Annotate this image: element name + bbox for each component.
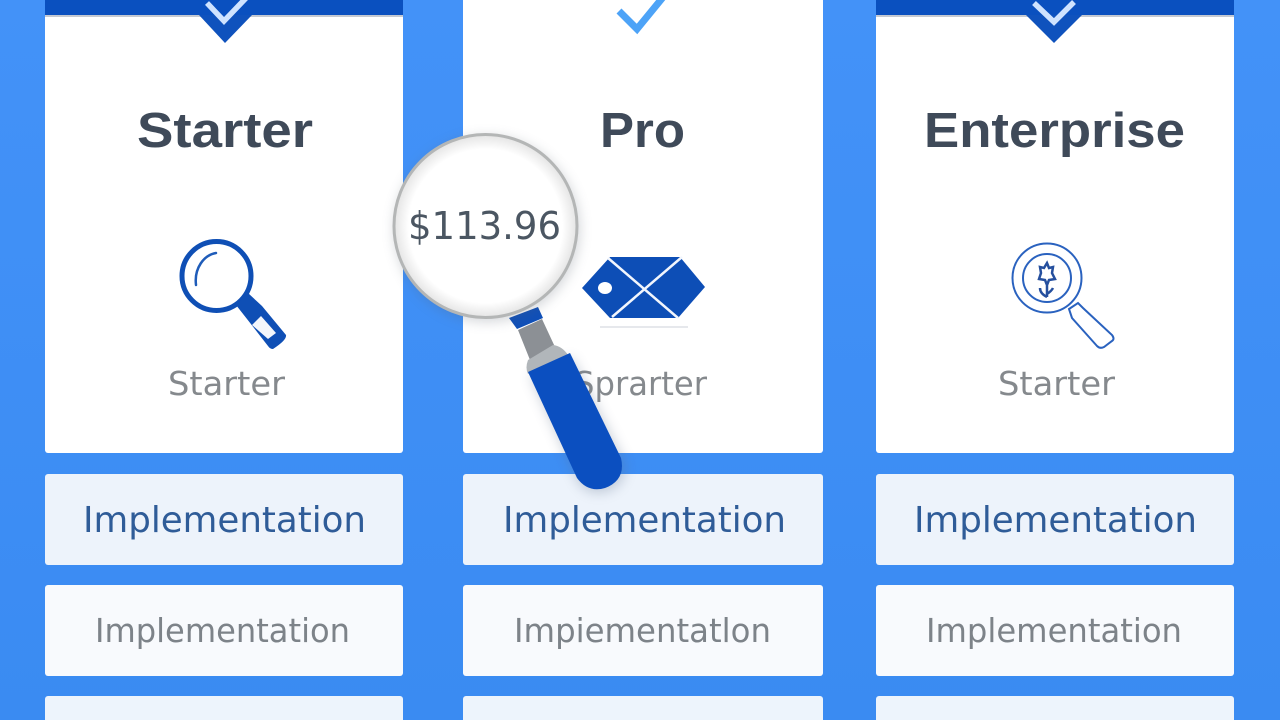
- Starter feature row 3: [45, 696, 403, 720]
- Enterprise card: [876, 0, 1234, 453]
- Starter feature row 2: [45, 585, 403, 676]
- Starter feature row 2: Implementation: [95, 611, 350, 650]
- Pro sub-label: Sprarter: [574, 364, 707, 403]
- panel: Enterprise column: [876, 0, 1234, 720]
- icon: price tag: [582, 257, 705, 328]
- Enterprise header band: [876, 0, 1234, 43]
- Enterprise feature row 2: [876, 585, 1234, 676]
- icon: magnifying glass: [182, 242, 286, 349]
- panel: Starter column: [45, 0, 403, 720]
- Pro feature row 1: [463, 474, 823, 565]
- Starter header band: [45, 0, 403, 43]
- icon: Enterprise check mark: [1034, 2, 1074, 22]
- Starter feature row 1: Implementation: [83, 500, 366, 541]
- Starter feature row 1: [45, 474, 403, 565]
- Enterprise feature row 2: Implementation: [926, 611, 1182, 650]
- panel: Pro column: [463, 0, 823, 720]
- Pro card: [463, 0, 823, 453]
- large magnifying glass with price: [394, 134, 625, 493]
- icon: magnifier with plant: [1012, 244, 1114, 348]
- icon: Pro check mark: [619, 0, 664, 29]
- Enterprise feature row 3: [876, 696, 1234, 720]
- magnifier handle: [509, 307, 625, 493]
- Enterprise feature row 1: Implementation: [914, 500, 1197, 541]
- Pro feature row 1: Implementation: [503, 500, 786, 541]
- Enterprise heading: Enterprise: [924, 104, 1185, 158]
- icon: Starter check mark: [207, 0, 247, 21]
- Enterprise feature row 1: [876, 474, 1234, 565]
- Starter card: [45, 0, 403, 453]
- Enterprise sub-label: Starter: [998, 364, 1115, 403]
- Starter heading: Starter: [137, 104, 313, 158]
- magnified price: $113.96: [408, 204, 561, 248]
- Pro heading: Pro: [600, 104, 685, 158]
- Pro feature row 2: Impiementatlon: [514, 611, 771, 650]
- Starter sub-label: Starter: [168, 364, 285, 403]
- magnifier lens: [394, 134, 580, 322]
- Pro feature row 3: [463, 696, 823, 720]
- Pro feature row 2: [463, 585, 823, 676]
